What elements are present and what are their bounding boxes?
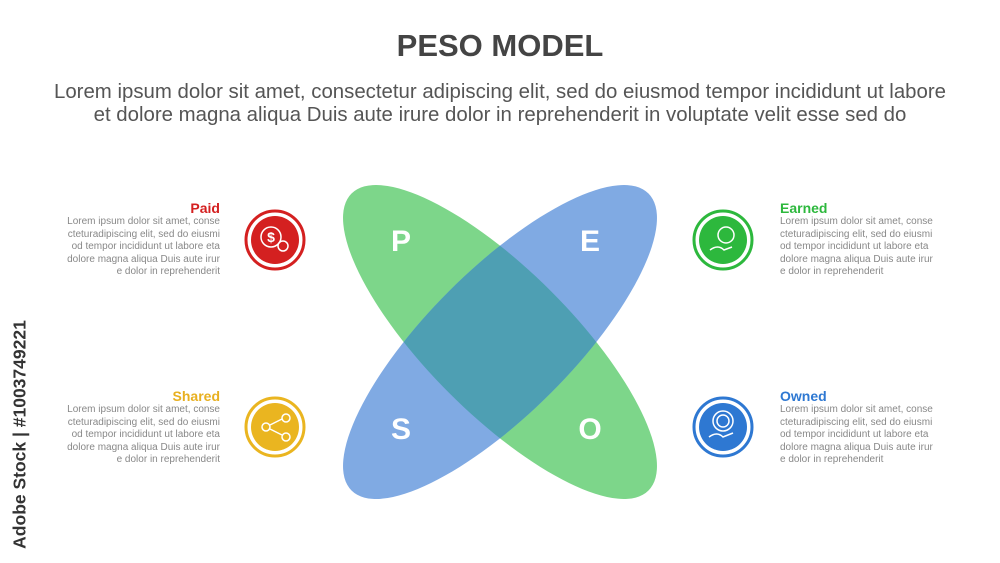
subtitle: [54, 81, 946, 126]
letters: P: [391, 225, 411, 258]
subtitle: et dolore magna aliqua Duis aute irure dolor in reprehenderit in voluptate velit esse sed do: [94, 104, 906, 126]
icon: paid: [246, 211, 304, 269]
text block: Owned: Lorem ipsum dolor sit amet, conse cteturadipiscing elit, sed do eiusmi od tempor incididunt ut labore eta dolore magna aliqua Duis aute irur e dolor in reprehenderit: [780, 404, 933, 465]
watermark side text: Adobe Stock | #1003749221: [10, 320, 30, 549]
text block: Earned: Lorem ipsum dolor sit amet, conse cteturadipiscing elit, sed do eiusmi od tempor incididunt ut labore eta dolore magna aliqua Duis aute irur e dolor in reprehenderit: [780, 216, 933, 277]
text block: Paid: Lorem ipsum dolor sit amet, conse cteturadipiscing elit, sed do eiusmi od tempor incididunt ut labore eta dolore magna aliqua Duis aute irur e dolor in reprehenderit: [67, 216, 220, 277]
letters: S: [391, 413, 411, 446]
overlap: [404, 246, 596, 438]
text block: Owned: Owned: [780, 388, 827, 404]
diagram: [244, 185, 754, 499]
letters: O: [578, 413, 602, 446]
title: PESO MODEL: [397, 28, 603, 63]
text block: Shared: Lorem ipsum dolor sit amet, conse cteturadipiscing elit, sed do eiusmi od tempor incididunt ut labore eta dolore magna aliqua Duis aute irur e dolor in reprehenderit: [67, 404, 220, 465]
ellipse: green P-O: [301, 143, 699, 541]
icon: earned: [694, 211, 752, 269]
letters: [391, 225, 602, 446]
text block: Earned: Earned: [780, 200, 827, 216]
icon: owned: [694, 398, 752, 456]
icon: shared: [246, 398, 304, 456]
icon: paid: $: [267, 229, 275, 245]
text block: Paid: Paid: [190, 200, 220, 216]
ellipse: blue E-S: [301, 143, 699, 541]
text block: Shared: Shared: [173, 388, 220, 404]
letters: E: [580, 225, 600, 258]
subtitle: Lorem ipsum dolor sit amet, consectetur adipiscing elit, sed do eiusmod tempor incididunt ut labore: [54, 81, 946, 103]
